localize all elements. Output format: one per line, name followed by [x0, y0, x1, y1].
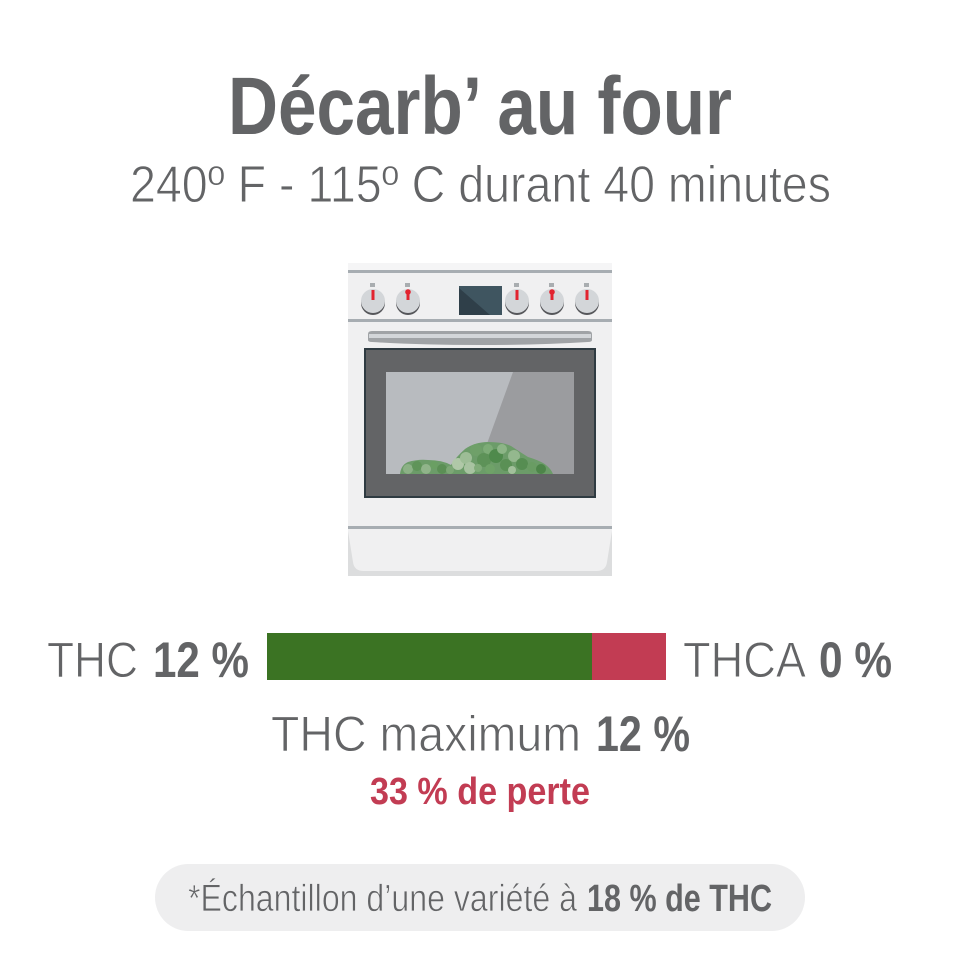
cannabis in oven: [398, 442, 556, 482]
title: Décarb’ au four: [228, 61, 732, 152]
footnote pill: *Échantillon d’une variété à: [188, 877, 578, 920]
oven window: [386, 372, 574, 474]
door handle: [368, 331, 592, 345]
label: THCA value: 0 %: [819, 632, 892, 688]
subtitle: 240º F - 115º C durant 40 minutes: [130, 156, 831, 214]
callout: loss: 33 % de perte: [370, 771, 590, 813]
control knobs: [361, 283, 599, 315]
label: THCA value: [683, 632, 892, 688]
oven door: [365, 349, 595, 497]
label: THC maximum: 12 %: [596, 706, 690, 762]
display: [459, 286, 502, 315]
footnote pill: 18 % de THC: [587, 878, 772, 920]
footnote pill: [155, 864, 805, 931]
icon: oven: [348, 263, 612, 576]
label: THC value: [47, 632, 249, 688]
label: THC value: THC: [47, 632, 138, 688]
drawer: [348, 531, 612, 576]
oven body: [348, 263, 612, 576]
label: THC value: 12 %: [153, 632, 249, 688]
label: THCA value: THCA: [683, 632, 807, 688]
label: THC maximum: THC maximum: [271, 706, 581, 762]
stacked bar: THC vs lost: [267, 633, 666, 680]
